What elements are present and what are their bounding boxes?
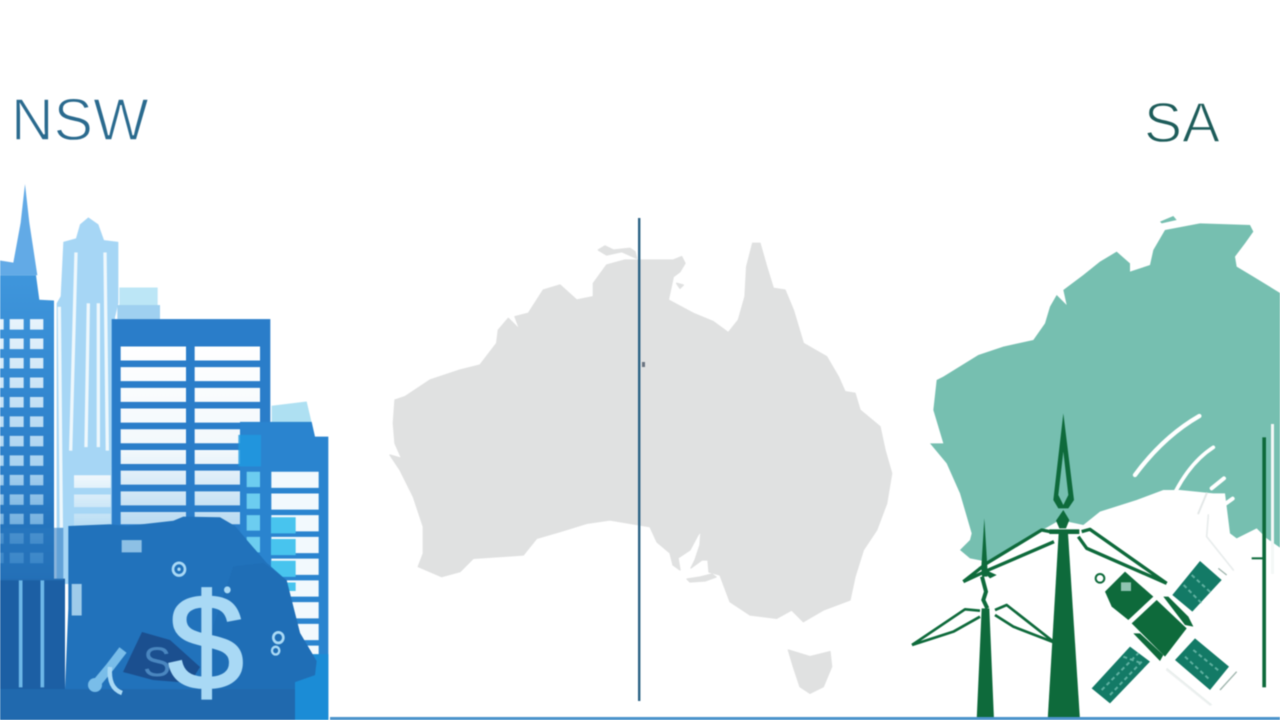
large turbine	[963, 413, 1167, 720]
pale block behind main building	[117, 288, 160, 319]
icon: dollar sign: $	[168, 566, 244, 718]
icon: bank note	[123, 632, 200, 685]
map: grey Australia	[390, 243, 892, 693]
small coins	[72, 540, 283, 654]
money bag	[0, 517, 328, 720]
right pale block	[272, 402, 312, 423]
pale tower	[57, 217, 118, 584]
island	[1160, 216, 1177, 223]
left dark building	[0, 275, 54, 584]
panel stripes	[1102, 575, 1220, 695]
small turbine	[912, 518, 1055, 720]
icon: hand holding note	[88, 650, 123, 693]
satellite body	[1096, 572, 1193, 661]
spire tower	[0, 184, 37, 275]
right edge turbine mast	[1252, 437, 1266, 687]
icon: bank note: S	[143, 638, 171, 685]
heading: NSW: NSW	[11, 87, 149, 153]
icon: wind turbines	[912, 413, 1266, 720]
map: Tasmania	[788, 650, 832, 693]
main office building	[112, 319, 270, 544]
thin white mast highlight	[1271, 424, 1274, 574]
heading: SA: SA	[1144, 91, 1220, 155]
pale tower lower windows	[37, 475, 147, 582]
map: teal Australia	[930, 216, 1280, 562]
map: islands	[598, 246, 716, 582]
divider line	[638, 218, 640, 701]
cursor speck	[642, 362, 645, 367]
bottom rule	[330, 717, 1280, 720]
dark building base	[0, 528, 65, 691]
illustration: blue city skyline with money bag	[0, 184, 328, 720]
solar panels	[1092, 561, 1229, 703]
right building	[238, 422, 328, 720]
icon: satellite	[1092, 561, 1237, 705]
faint struts	[1167, 568, 1237, 705]
icon: white signal arcs	[1135, 416, 1233, 705]
